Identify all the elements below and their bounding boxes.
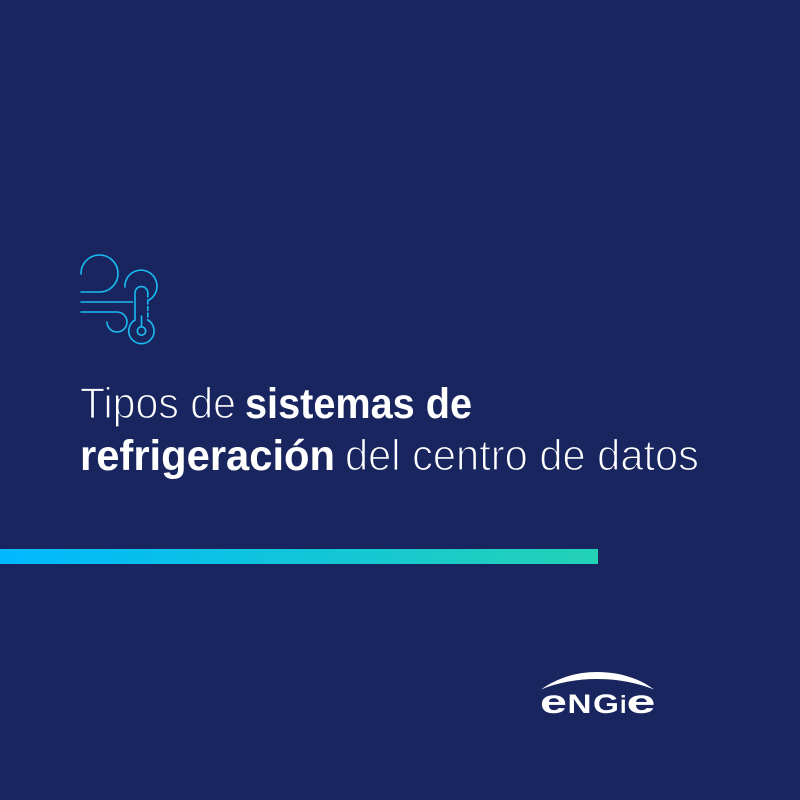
logo wordmark: N (568, 689, 592, 719)
gradient bar (0, 549, 598, 564)
logo wordmark: e (540, 683, 567, 720)
title line 1 (80, 379, 472, 428)
title line 1: Tipos de (80, 379, 236, 428)
logo: ENGIE (540, 672, 656, 720)
logo wordmark (540, 683, 656, 720)
logo wordmark: i (620, 691, 626, 719)
logo wordmark: e (626, 683, 656, 720)
title (80, 379, 699, 480)
title line 2: refrigeración (80, 432, 335, 480)
title line 1: sistemas de (245, 380, 472, 428)
title line 2: del centro de datos (345, 431, 699, 480)
icon: wind and thermometer (81, 255, 157, 344)
logo arc (541, 672, 654, 690)
logo wordmark: G (593, 689, 619, 719)
title line 2 (80, 431, 699, 480)
